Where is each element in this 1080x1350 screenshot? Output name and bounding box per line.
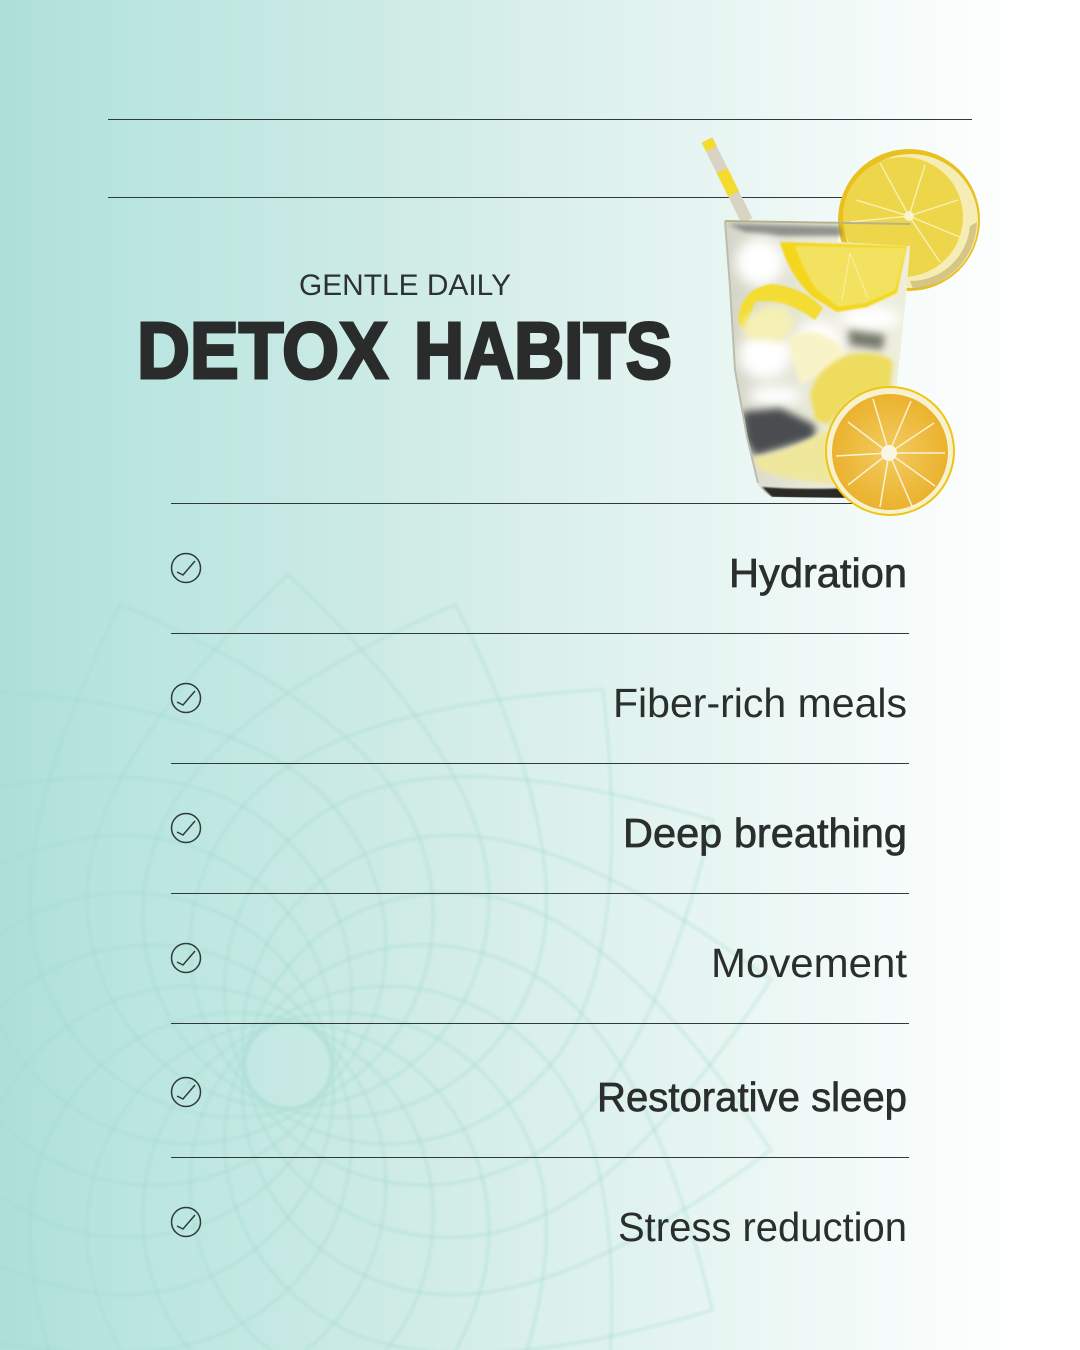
check icon — [172, 1208, 200, 1236]
dark water band — [742, 408, 815, 456]
list item: Stress reduction — [172, 1204, 907, 1250]
lemon wedge inside glass — [780, 242, 907, 312]
check icon — [172, 814, 200, 842]
dark rim reflection — [728, 224, 842, 236]
title word: DETOX: DETOX — [137, 306, 388, 395]
label: Restorative sleep — [597, 1074, 907, 1120]
list item: Restorative sleep — [172, 1074, 907, 1120]
list rule 4 — [171, 893, 909, 894]
decorative mandala watermark — [0, 570, 790, 1350]
list rule 1 — [171, 503, 909, 504]
subtitle: GENTLE DAILY — [299, 269, 511, 302]
list item: Hydration — [172, 550, 907, 596]
straw — [707, 140, 747, 221]
label: Stress reduction — [618, 1204, 907, 1250]
ice cubes — [736, 238, 900, 406]
list rule 6 — [171, 1157, 909, 1158]
lemon slice on rim — [838, 149, 980, 291]
header rule second — [108, 197, 853, 198]
check icon — [172, 554, 200, 582]
dark glass base — [762, 486, 845, 498]
list item: Fiber-rich meals — [172, 680, 907, 726]
label: Fiber-rich meals — [613, 680, 907, 726]
list item: Movement — [172, 940, 908, 986]
label: Hydration — [729, 550, 907, 596]
lemon slice lower-left — [738, 284, 823, 330]
glass body — [725, 221, 910, 500]
list item: Deep breathing — [172, 810, 907, 856]
image: lemon water glass — [707, 140, 980, 516]
list rule 5 — [171, 1023, 909, 1024]
lemon at the bottom — [752, 430, 845, 484]
label: Deep breathing — [623, 810, 907, 856]
check icon — [172, 1078, 200, 1106]
list rule 2 — [171, 633, 909, 634]
label: Movement — [711, 940, 908, 986]
header rule top — [108, 119, 972, 120]
check icon — [172, 944, 200, 972]
lemon slice mid-right — [810, 353, 893, 425]
list rule 3 — [171, 763, 909, 764]
check icon — [172, 684, 200, 712]
title word: HABITS: HABITS — [414, 306, 672, 395]
title — [137, 306, 672, 395]
whole lemon slice in front — [825, 386, 955, 516]
